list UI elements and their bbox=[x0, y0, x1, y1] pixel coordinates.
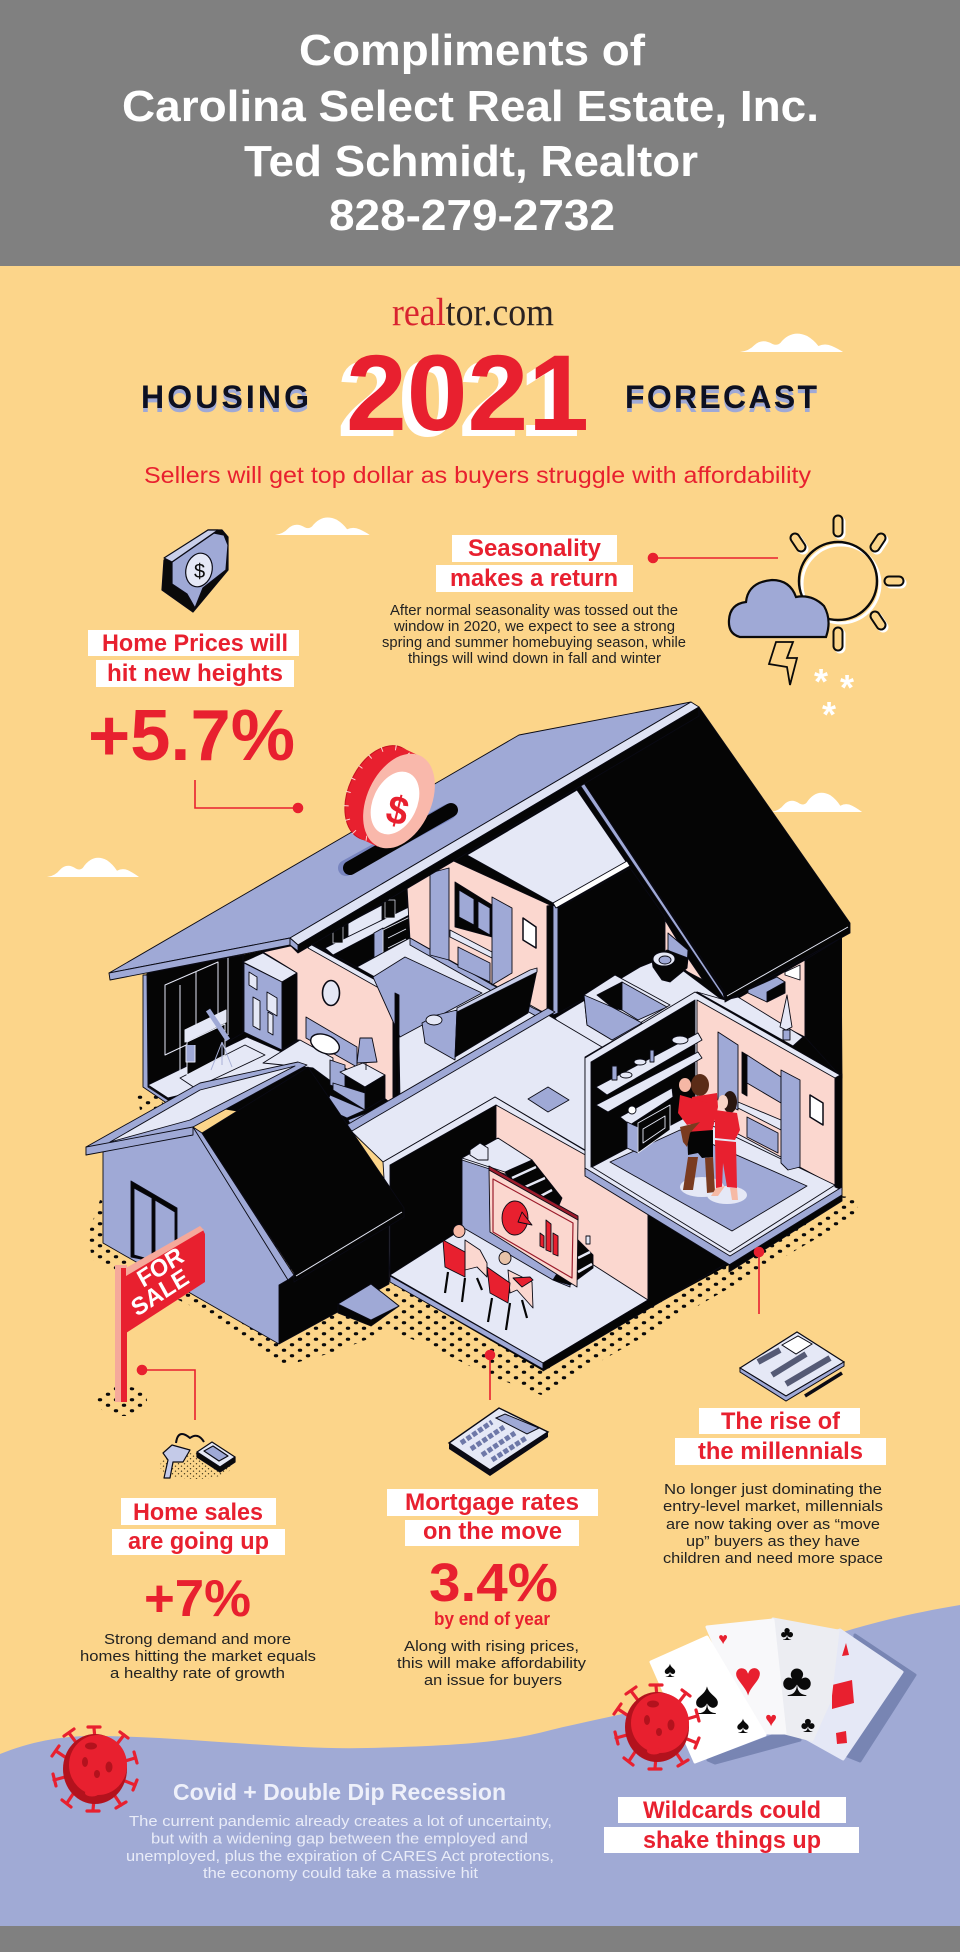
card shadow bbox=[708, 1635, 915, 1763]
subtitle: Sellers will get top dollar as buyers struggle with affordability bbox=[144, 462, 812, 488]
child bbox=[678, 1078, 708, 1147]
label: mortgage rates: Mortgage rates bbox=[405, 1489, 579, 1516]
curtain left bbox=[430, 868, 449, 960]
floor bbox=[390, 1205, 648, 1363]
right black roof bbox=[578, 707, 850, 1002]
sign: for sale bbox=[115, 1226, 205, 1402]
floor lamp bbox=[780, 995, 792, 1030]
text: seasonality body: After normal seasonality was tossed out the bbox=[390, 603, 678, 619]
room back wall bbox=[147, 955, 243, 1087]
back wall bbox=[407, 858, 550, 1012]
black wall bbox=[390, 1105, 496, 1275]
window bbox=[450, 882, 492, 982]
text: mortgage body: Along with rising prices, bbox=[404, 1639, 579, 1655]
bathtub bbox=[584, 975, 670, 1040]
clock bbox=[322, 980, 340, 1006]
icon: newspaper and pen bbox=[740, 1332, 844, 1401]
far room behind roof bbox=[697, 938, 842, 1078]
label: seasonality: Seasonality bbox=[468, 535, 602, 562]
card: heart: ♥ bbox=[718, 1631, 728, 1648]
window and curtains bbox=[718, 1032, 823, 1170]
pink wall bbox=[263, 946, 393, 1105]
coin slot bbox=[346, 810, 451, 868]
column bbox=[547, 905, 553, 1015]
card: heart bbox=[707, 1620, 785, 1733]
cloud top right bbox=[740, 334, 843, 352]
text: millennials body bbox=[663, 1482, 883, 1567]
lightning bolt bbox=[769, 642, 797, 685]
garage side wall bbox=[103, 1127, 294, 1344]
floor vent bbox=[528, 1087, 569, 1112]
word: housing: HOUSING bbox=[141, 379, 309, 415]
label: home sales: Home sales bbox=[133, 1499, 263, 1526]
footer band bbox=[0, 1926, 960, 1952]
doorstep bbox=[338, 1284, 399, 1326]
text: home sales body bbox=[80, 1632, 316, 1682]
connector: home sales bbox=[138, 1366, 195, 1420]
cloud near seasonality bbox=[275, 518, 370, 535]
header text: Carolina Select Real Estate, Inc. bbox=[122, 82, 819, 131]
garage black roof bbox=[193, 1127, 294, 1280]
garage bbox=[86, 1062, 404, 1344]
stat: 3.4%: 3.4% bbox=[429, 1553, 558, 1613]
text: by end of year: by end of year bbox=[434, 1609, 550, 1629]
window and telescope bbox=[165, 958, 232, 1075]
toilet bbox=[652, 933, 688, 982]
snowflakes: * bbox=[840, 667, 854, 708]
label: seasonality bbox=[436, 535, 633, 592]
card: club: ♣ bbox=[801, 1712, 815, 1737]
cloud left of roof bbox=[47, 858, 139, 877]
left bedroom bbox=[143, 944, 400, 1128]
floor bbox=[357, 938, 548, 1100]
label: wildcards: Wildcards could bbox=[643, 1797, 821, 1824]
wardrobe door bbox=[243, 953, 297, 1050]
header band bbox=[0, 0, 960, 266]
text: mortgage body: this will make affordability bbox=[397, 1656, 587, 1672]
text: mortgage body bbox=[397, 1639, 587, 1689]
text: covid body: The current pandemic already creates a lot of uncertainty, bbox=[129, 1814, 552, 1830]
realtor.com logo: realtor.com bbox=[392, 291, 554, 334]
label: seasonality: makes a return bbox=[450, 565, 618, 592]
text: covid body bbox=[126, 1814, 554, 1882]
card: spade: ♠ bbox=[737, 1712, 750, 1739]
title: housing 2021 forecast bbox=[141, 332, 817, 459]
word: housing: HOUSING bbox=[141, 383, 309, 419]
pink wall bbox=[697, 1000, 835, 1186]
card: heart: ♥ bbox=[734, 1653, 762, 1706]
card: spade: ♠ bbox=[664, 1657, 676, 1682]
lamp and nightstand bbox=[325, 1038, 385, 1118]
text: seasonality body: things will wind down in fall and winter bbox=[408, 651, 661, 667]
floor bbox=[555, 957, 725, 1057]
connector: mortgage bbox=[486, 1350, 494, 1400]
right family room bbox=[585, 992, 842, 1272]
bathroom bbox=[555, 868, 725, 1057]
snowflakes: * bbox=[814, 661, 828, 702]
main left roof bbox=[109, 702, 699, 980]
label: home prices bbox=[88, 630, 299, 687]
card: club bbox=[773, 1619, 838, 1740]
rain cloud bbox=[729, 580, 829, 637]
roof fascia bbox=[109, 938, 290, 980]
carpet bbox=[610, 1130, 807, 1231]
word: forecast: FORECAST bbox=[625, 383, 817, 419]
card: spade bbox=[651, 1637, 765, 1762]
header text: Compliments of bbox=[299, 26, 645, 75]
card: heart: ♥ bbox=[765, 1709, 777, 1731]
text: seasonality body: window in 2020, we expect to see a strong bbox=[393, 619, 675, 635]
stairs bbox=[462, 1138, 593, 1287]
label: millennials: The rise of bbox=[721, 1408, 841, 1435]
label: wildcards: shake things up bbox=[643, 1827, 821, 1854]
back wall bbox=[558, 868, 665, 1013]
shelves and kitchen bbox=[596, 1033, 702, 1153]
text: covid body: unemployed, plus the expiration of CARES Act protections, bbox=[126, 1849, 554, 1865]
frame bbox=[585, 992, 842, 1262]
label: home prices: Home Prices will bbox=[102, 630, 288, 657]
text: covid body: but with a widening gap between the employed and bbox=[151, 1832, 528, 1848]
upper landing bbox=[467, 790, 627, 903]
seated viewer one bbox=[443, 1224, 487, 1302]
bed bbox=[263, 1017, 357, 1090]
living room bbox=[298, 858, 558, 1100]
father bbox=[683, 1074, 718, 1193]
base edge bbox=[585, 1168, 842, 1265]
pink wall bbox=[496, 1105, 648, 1300]
text: home sales body: Strong demand and more bbox=[104, 1632, 291, 1648]
text: home sales body: a healthy rate of growth bbox=[110, 1666, 285, 1682]
curtain right bbox=[492, 897, 512, 985]
text: covid body: the economy could take a massive hit bbox=[203, 1866, 478, 1882]
icon: speech bubble with dollar: $ bbox=[194, 561, 205, 583]
frame bbox=[383, 1097, 648, 1363]
stat: +7%: +7% bbox=[144, 1570, 251, 1628]
wave panel: wildcards background bbox=[0, 1605, 960, 1952]
icon: virus right bbox=[614, 1685, 699, 1769]
header text: Ted Schmidt, Realtor bbox=[244, 137, 698, 186]
hall floor bbox=[345, 1008, 602, 1162]
connector: seasonality to weather bbox=[648, 554, 778, 562]
label: home prices: hit new heights bbox=[107, 660, 283, 687]
text: millennials body: are now taking over as “move bbox=[666, 1517, 880, 1533]
card: club: ♣ bbox=[780, 1623, 794, 1645]
base slab bbox=[390, 1276, 543, 1369]
carpet bbox=[373, 957, 482, 1037]
illustration: isometric house bbox=[86, 702, 850, 1371]
label: home sales bbox=[112, 1498, 285, 1555]
sign: for sale: SALE bbox=[127, 1264, 194, 1322]
label: wildcards bbox=[604, 1797, 859, 1854]
year 2021: 2021 bbox=[337, 338, 580, 459]
label: home sales: are going up bbox=[128, 1528, 269, 1555]
sign text: FOR bbox=[133, 1242, 188, 1293]
house underlay bbox=[143, 707, 842, 1371]
family bbox=[678, 1074, 747, 1204]
cloud right of roof bbox=[771, 793, 862, 812]
floor strip bbox=[348, 1103, 400, 1128]
icon: calculator bbox=[449, 1408, 548, 1476]
heading: covid and recession: Covid + Double Dip Recession bbox=[173, 1779, 506, 1805]
text: millennials body: up” buyers as they have bbox=[686, 1534, 860, 1550]
sign pole bbox=[115, 1265, 127, 1402]
word: forecast: FORECAST bbox=[625, 379, 817, 415]
seated viewer two bbox=[487, 1252, 533, 1330]
wall end post bbox=[395, 993, 399, 1100]
text: seasonality body: spring and summer homebuying season, while bbox=[382, 635, 686, 651]
label: mortgage rates bbox=[387, 1489, 598, 1546]
text: home sales body: homes hitting the market equals bbox=[80, 1649, 316, 1665]
label: millennials: the millennials bbox=[698, 1438, 863, 1465]
mother bbox=[711, 1091, 740, 1200]
header text: 828-279-2732 bbox=[329, 191, 615, 240]
snowflakes bbox=[814, 661, 854, 735]
label: millennials bbox=[675, 1408, 886, 1465]
pink sliver bbox=[665, 920, 703, 980]
garage door bbox=[131, 1181, 177, 1266]
header text bbox=[122, 26, 819, 240]
black wall bbox=[591, 1000, 695, 1167]
connector: millennials bbox=[754, 1248, 764, 1314]
card: diamond bbox=[800, 1630, 902, 1759]
lower room bbox=[383, 1097, 648, 1369]
black wall under right room bbox=[543, 1195, 729, 1371]
snowflakes: * bbox=[822, 694, 836, 735]
tv wall bbox=[298, 888, 415, 967]
sun bbox=[795, 520, 901, 648]
text: millennials body: No longer just dominating the bbox=[664, 1482, 882, 1498]
sofa bbox=[422, 968, 537, 1060]
icon: speech bubble with dollar bbox=[162, 530, 228, 612]
icon: keys bbox=[160, 1434, 235, 1479]
picture bbox=[523, 918, 536, 948]
ground dots bbox=[88, 1095, 858, 1416]
sign board bbox=[126, 1228, 205, 1333]
wall sink bbox=[748, 977, 785, 1002]
text: millennials body: entry-level market, millennials bbox=[663, 1499, 883, 1515]
icon: playing cards bbox=[651, 1619, 915, 1763]
text: mortgage body: an issue for buyers bbox=[424, 1673, 562, 1689]
icon: sun, cloud, lightning and snow bbox=[729, 520, 901, 735]
text: millennials body: children and need more space bbox=[663, 1551, 883, 1567]
label: mortgage rates: on the move bbox=[423, 1518, 562, 1545]
card: spade: ♠ bbox=[695, 1672, 719, 1724]
coin with dollar: $ bbox=[382, 787, 413, 835]
garage roof light side bbox=[86, 1062, 307, 1155]
wall end bbox=[393, 993, 399, 1103]
floor bbox=[148, 1037, 300, 1098]
presentation screen bbox=[489, 1166, 578, 1287]
garage black wall bbox=[279, 1221, 389, 1344]
year 2021: 2021 bbox=[346, 332, 589, 453]
text: seasonality body bbox=[382, 603, 686, 667]
connector: price to coin bbox=[195, 780, 302, 812]
card: club: ♣ bbox=[782, 1654, 812, 1706]
stat: +5.7%: +5.7% bbox=[88, 696, 295, 776]
right edge bbox=[835, 1074, 842, 1190]
floor bbox=[592, 1115, 835, 1252]
icon: virus left bbox=[52, 1727, 137, 1811]
coin with dollar bbox=[331, 734, 449, 860]
